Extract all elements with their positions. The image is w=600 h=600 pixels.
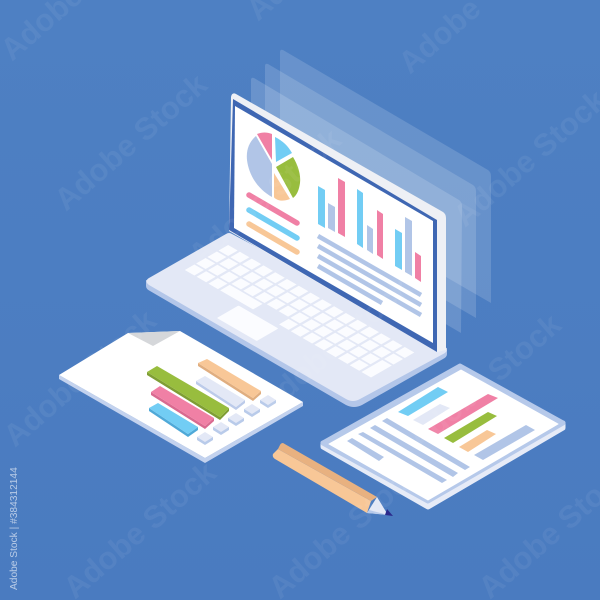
stock watermark: Adobe Stock xyxy=(402,306,568,457)
pencil xyxy=(273,443,393,516)
keyboard xyxy=(185,245,414,378)
bar: orange xyxy=(198,359,261,401)
right report tablet xyxy=(323,366,563,507)
bar chart xyxy=(318,178,421,282)
laptop lid xyxy=(229,93,446,352)
screen xyxy=(234,106,433,343)
laptop xyxy=(146,93,447,407)
stock watermark: Adobe Stock xyxy=(48,66,214,217)
report text lines xyxy=(347,418,470,483)
pencil tip xyxy=(385,509,393,516)
left paper document xyxy=(59,331,303,463)
stock watermark: Adobe Stock xyxy=(252,269,418,420)
small squares xyxy=(197,395,276,445)
bar: green xyxy=(147,366,229,420)
colored text lines xyxy=(249,195,297,252)
pie chart xyxy=(247,132,300,201)
bar: periwinkle xyxy=(196,376,245,410)
stock watermark: Adobe Stock xyxy=(0,302,163,453)
image id: Adobe Stock | #384312144 xyxy=(9,467,20,590)
folded corner xyxy=(128,331,180,346)
trackpad xyxy=(217,306,278,341)
bar: cyan xyxy=(149,403,198,437)
report lines xyxy=(318,236,421,315)
laptop base xyxy=(146,233,447,407)
bar: pink xyxy=(151,386,214,429)
report bars xyxy=(398,387,535,460)
translucent layers behind the screen xyxy=(251,50,491,333)
stock watermark: Adobe Stock xyxy=(182,121,348,272)
